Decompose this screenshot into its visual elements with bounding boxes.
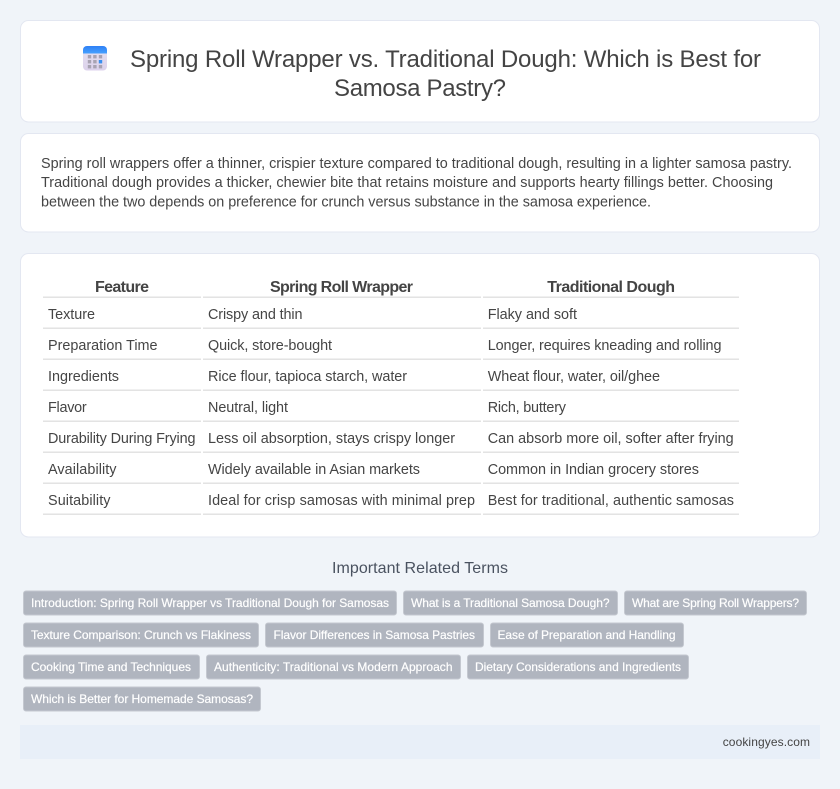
table header	[95, 279, 675, 296]
tag	[624, 591, 806, 615]
row: preparation time: Longer, requires kneading and rolling	[488, 338, 722, 354]
row: flavor: Neutral, light	[208, 400, 288, 416]
panel: introduction text	[20, 134, 820, 232]
row: texture: Crispy and thin	[208, 307, 302, 323]
row: flavor: Flavor	[48, 400, 87, 416]
tag: Texture Comparison: Crunch vs Flakiness	[31, 628, 251, 642]
row: suitability: Suitability	[48, 493, 111, 509]
row: ingredients: Ingredients	[48, 369, 119, 385]
row: durability during frying: Less oil absorption, stays crispy longer	[208, 431, 455, 447]
table header: Feature	[95, 279, 149, 296]
table header: Traditional Dough	[547, 279, 675, 296]
row: suitability: Ideal for crisp samosas with minimal prep	[208, 493, 475, 509]
row: availability: Widely available in Asian markets	[208, 462, 420, 478]
icon: calendar	[83, 46, 107, 70]
row: preparation time	[48, 338, 722, 354]
tag: Which is Better for Homemade Samosas?	[31, 692, 253, 706]
row: flavor	[48, 400, 567, 416]
heading: important related terms: Important Related Terms	[332, 560, 508, 577]
row: durability during frying: Durability During Frying	[48, 431, 196, 447]
row: texture: Flaky and soft	[488, 307, 577, 323]
tag: Dietary Considerations and Ingredients	[475, 660, 681, 674]
panel: introduction text: Traditional dough provides a thicker, chewier bite that retains moisture and supports hearty fillings better. Choosing	[41, 175, 773, 191]
title	[130, 46, 761, 102]
row: ingredients: Wheat flour, water, oil/ghee	[488, 369, 660, 385]
table header: Spring Roll Wrapper	[270, 279, 413, 296]
tag	[206, 655, 460, 679]
row: availability: Common in Indian grocery stores	[488, 462, 699, 478]
panel: introduction text: Spring roll wrappers offer a thinner, crispier texture compared to traditional dough, resulting in a lighter samosa pastry.	[41, 156, 792, 172]
title: Spring Roll Wrapper vs. Traditional Dough: Which is Best for	[130, 46, 761, 73]
row: ingredients	[48, 369, 660, 385]
row: flavor: Rich, buttery	[488, 400, 567, 416]
tag: What is a Traditional Samosa Dough?	[411, 596, 610, 610]
tag: Ease of Preparation and Handling	[498, 628, 676, 642]
tag	[404, 591, 618, 615]
tag	[490, 623, 684, 647]
tag	[24, 591, 396, 615]
row: durability during frying: Can absorb more oil, softer after frying	[488, 431, 734, 447]
row: preparation time: Quick, store-bought	[208, 338, 332, 354]
tag	[24, 655, 200, 679]
tag	[468, 655, 688, 679]
panel: comparison table	[20, 254, 820, 537]
header panel	[20, 20, 820, 122]
title: Samosa Pastry?	[334, 75, 506, 102]
row: preparation time: Preparation Time	[48, 338, 158, 354]
row: durability during frying	[48, 431, 734, 447]
tag: Flavor Differences in Samosa Pastries	[274, 628, 475, 642]
row: ingredients: Rice flour, tapioca starch, water	[208, 369, 407, 385]
row: availability	[48, 462, 699, 478]
tag list	[24, 591, 806, 711]
panel: introduction text: between the two depends on preference for crunch versus substance in the samosa experience.	[41, 194, 651, 210]
row: texture	[48, 307, 577, 323]
row: suitability	[48, 493, 734, 509]
row: suitability: Best for traditional, authentic samosas	[488, 493, 734, 509]
tag	[266, 623, 484, 647]
tag: Cooking Time and Techniques	[31, 660, 191, 674]
tag: Introduction: Spring Roll Wrapper vs Traditional Dough for Samosas	[31, 596, 389, 610]
footer: cookingyes.com	[723, 735, 810, 749]
tag: What are Spring Roll Wrappers?	[632, 596, 799, 610]
tag	[24, 687, 260, 711]
row: availability: Availability	[48, 462, 117, 478]
footer	[20, 725, 820, 759]
row: texture: Texture	[48, 307, 95, 323]
tag	[24, 623, 258, 647]
tag: Authenticity: Traditional vs Modern Approach	[214, 660, 452, 674]
